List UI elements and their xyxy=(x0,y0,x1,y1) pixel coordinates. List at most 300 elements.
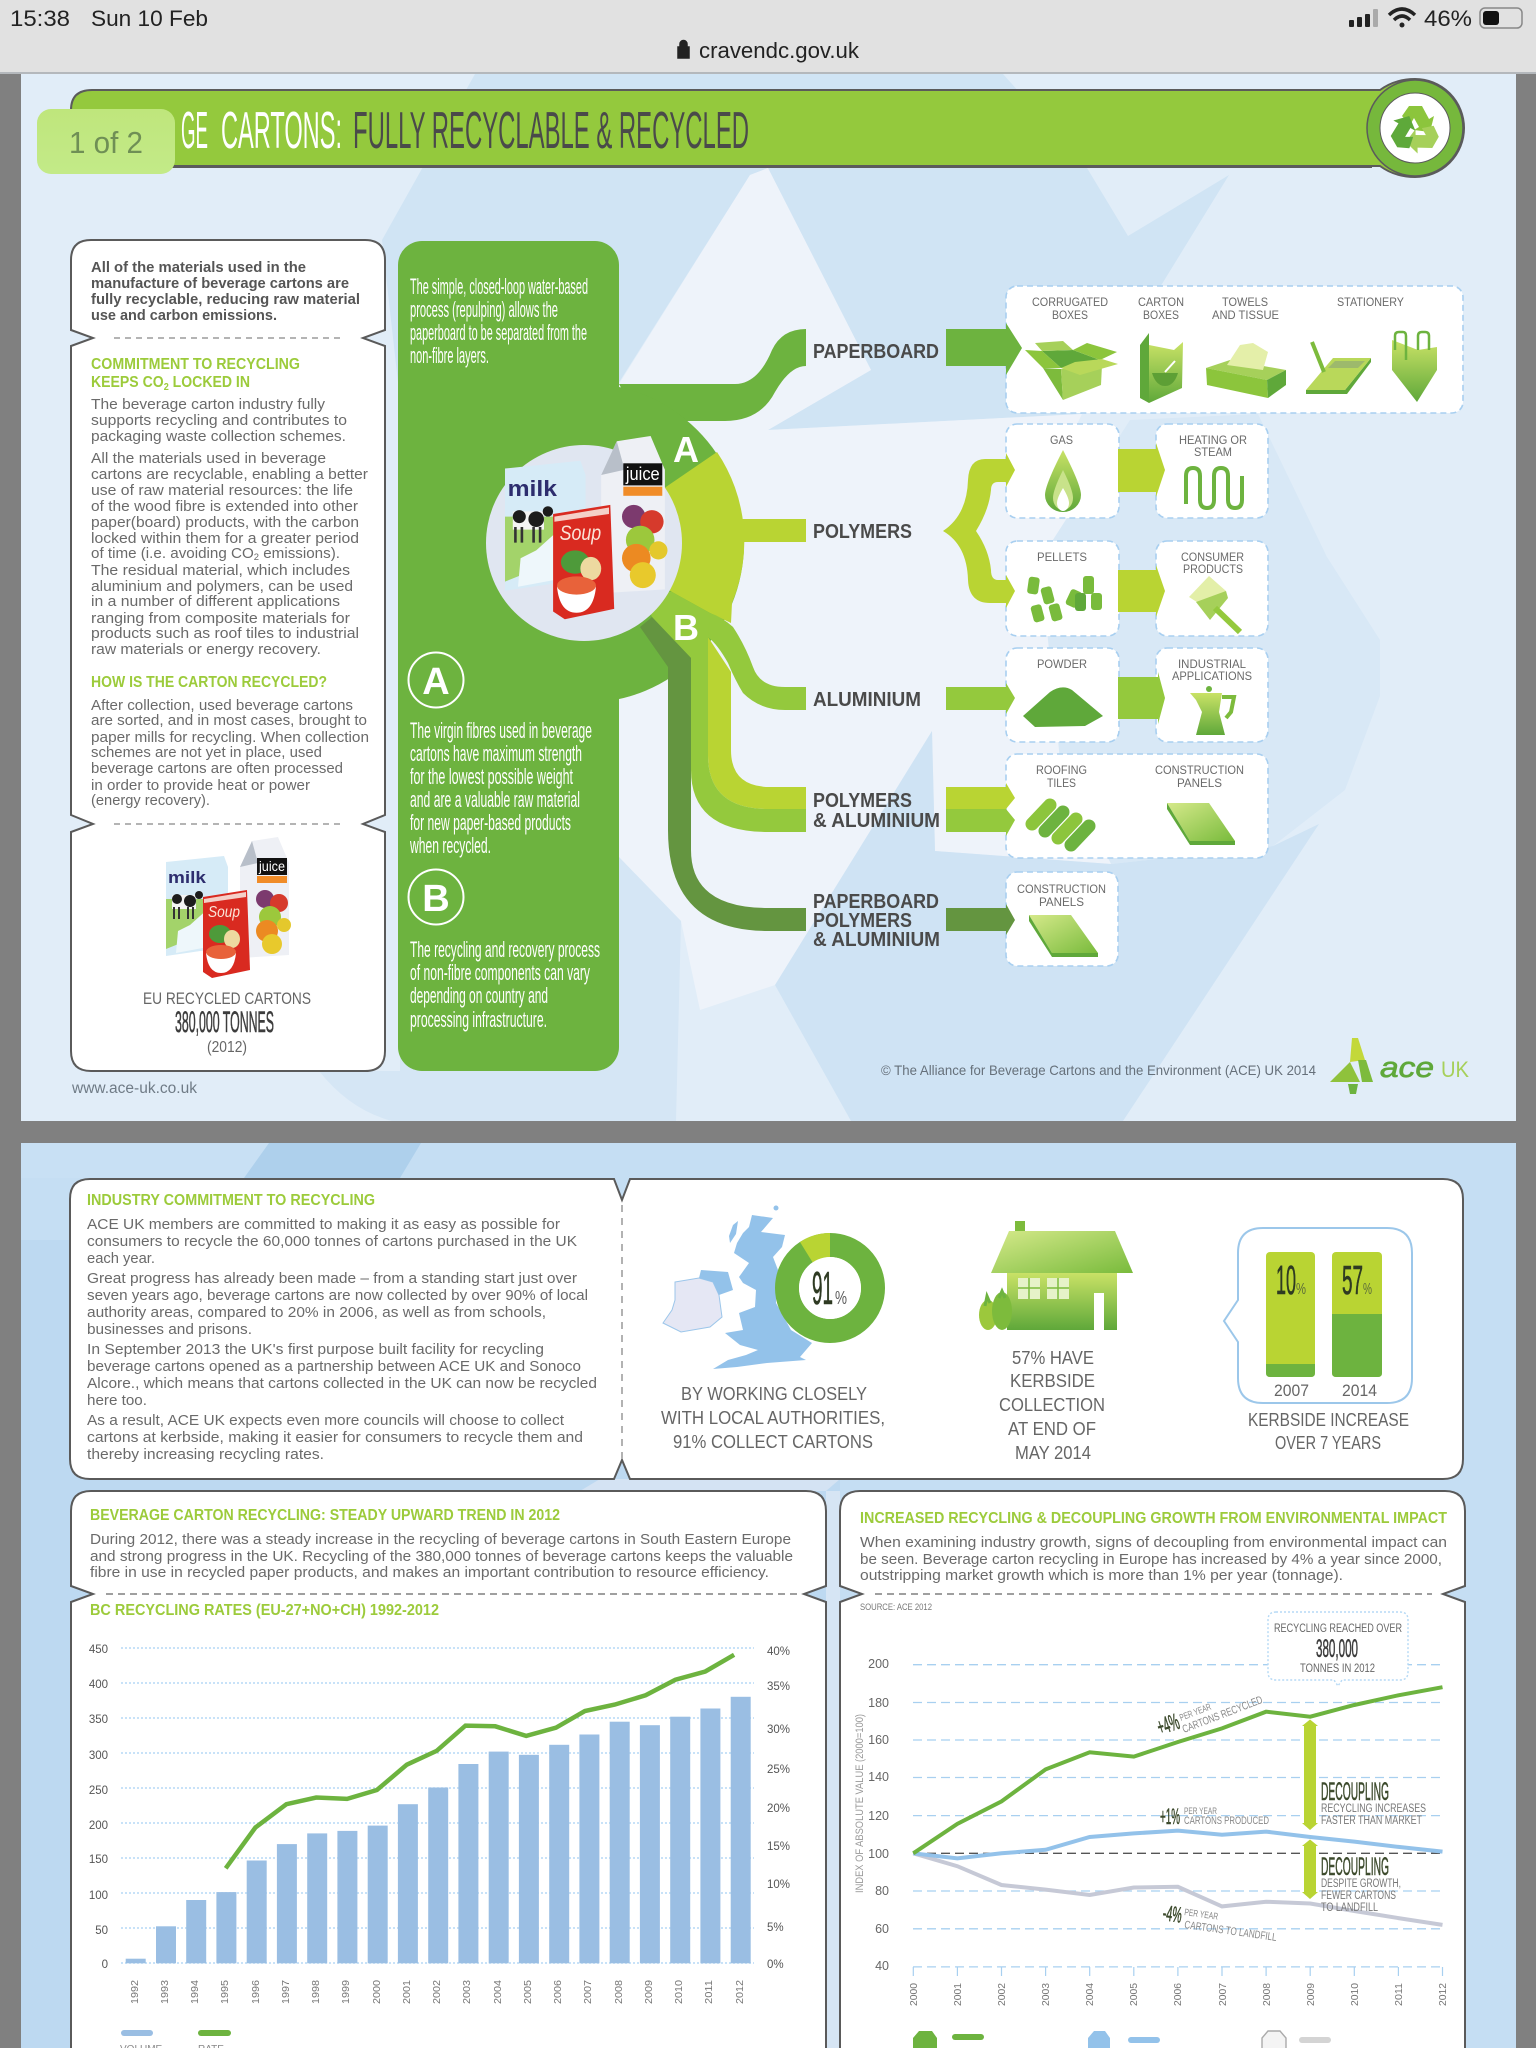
arrow: decoupling lower xyxy=(1302,1840,1318,1899)
bar chart: recycling rates: 30% xyxy=(767,1724,790,1736)
line chart: decoupling: 2000 xyxy=(908,1983,920,2006)
section: commitment to recycling: locked within them for a greater period xyxy=(91,531,359,547)
section: commitment to recycling: All the materials used in beverage xyxy=(91,451,326,467)
box: paperboard products: STATIONERY xyxy=(1337,295,1404,309)
commitment text: As a result, ACE UK expects even more councils will choose to collect xyxy=(87,1413,564,1429)
bar chart: recycling rates: 0% xyxy=(767,1959,784,1971)
browser status bar: 46% xyxy=(1424,6,1472,31)
bar chart: recycling rates: 400 xyxy=(89,1679,108,1691)
icon: pellets xyxy=(1027,576,1102,623)
title banner xyxy=(71,79,1464,177)
note: decoupling upper xyxy=(1321,1778,1426,1827)
arrow: paperboard xyxy=(946,323,1022,375)
stream labels: POLYMERS xyxy=(813,910,912,932)
icon: three cartons: Soup xyxy=(208,904,240,921)
arrow: decoupling upper xyxy=(1302,1720,1318,1830)
bar chart: recycling rates: 40% xyxy=(767,1646,790,1658)
section: how is the carton recycled: are sorted, and in most cases, brought to xyxy=(91,713,367,729)
trend text: BEVERAGE CARTON RECYCLING: STEADY UPWARD TREND IN 2012 xyxy=(90,1507,560,1524)
caption: kerbside increase xyxy=(1248,1409,1409,1453)
stream labels xyxy=(813,341,940,951)
line chart: decoupling: 120 xyxy=(868,1809,889,1823)
arrow: powder to industrial xyxy=(1118,672,1165,724)
icon: moka pot xyxy=(1190,686,1234,735)
icon: three cartons: milk xyxy=(168,868,207,887)
panel: recycling trend chart xyxy=(71,1491,826,2048)
title text: CARTONS: xyxy=(221,102,342,160)
panel: green process explanation xyxy=(398,241,619,1071)
text: virgin fibres: for the lowest possible weight xyxy=(410,764,573,789)
section: how is the carton recycled: beverage cartons are often processed xyxy=(91,761,343,777)
stream labels: POLYMERS xyxy=(813,521,912,543)
text: recovery process: The recycling and recovery process xyxy=(410,937,600,962)
section: how is the carton recycled: After collection, used beverage cartons xyxy=(91,698,353,714)
section: how is the carton recycled: in order to provide heat or power xyxy=(91,778,310,794)
logo: ACE UK: ace xyxy=(1380,1052,1434,1084)
browser status bar xyxy=(0,0,1536,74)
text: virgin fibres: when recycled. xyxy=(409,833,491,858)
line chart: decoupling: 80 xyxy=(875,1884,889,1898)
section: commitment to recycling: COMMITMENT TO RECYCLING xyxy=(91,356,300,373)
page 1 background with recycling shapes xyxy=(21,74,1516,1121)
caption: local authorities: BY WORKING CLOSELY xyxy=(681,1383,867,1404)
bar chart: recycling rates: 450 xyxy=(89,1644,108,1656)
line chart: decoupling: 180 xyxy=(868,1696,889,1710)
box: paperboard products: AND TISSUE xyxy=(1212,308,1279,322)
decoupling text: When examining industry growth, signs of decoupling from environmental impact can xyxy=(860,1535,1447,1551)
note: decoupling lower: DESPITE GROWTH, xyxy=(1321,1878,1401,1890)
text: recovery process: of non-fibre components can vary xyxy=(410,960,590,985)
note: decoupling lower: TO LANDFILL xyxy=(1321,1902,1378,1914)
line chart: decoupling: 2007 xyxy=(1217,1983,1229,2006)
icon: house with bags xyxy=(979,1221,1133,1330)
copyright: © The Alliance for Beverage Cartons and the Environment (ACE) UK 2014 xyxy=(881,1062,1316,1078)
box: industrial applications: APPLICATIONS xyxy=(1172,669,1252,683)
stream labels: & ALUMINIUM xyxy=(813,810,940,832)
note: decoupling lower xyxy=(1321,1853,1401,1914)
commitment text: Great progress has already been made – from a standing start just over xyxy=(87,1271,577,1287)
title text: BEVERA xyxy=(100,102,174,160)
map: UK and Ireland xyxy=(663,1206,812,1369)
bar chart: recycling rates: 2011 xyxy=(703,1980,715,2004)
arrow: polymers and aluminium xyxy=(946,783,1015,836)
panel: decoupling chart xyxy=(840,1491,1465,2048)
bar chart: recycling rates: 0 xyxy=(102,1959,108,1971)
caption: local authorities: WITH LOCAL AUTHORITIES, xyxy=(661,1407,885,1428)
section: commitment to recycling: supports recycling and contributes to xyxy=(91,413,347,429)
chart: donut 91%: 91 xyxy=(812,1262,833,1314)
page badge: 1 of 2 xyxy=(37,109,175,174)
section: commitment to recycling: packaging waste collection schemes. xyxy=(91,429,346,445)
caption: kerbside collection: COLLECTION xyxy=(999,1394,1105,1415)
box: paperboard products xyxy=(1006,286,1463,413)
annotation: +1% cartons produced: +1% xyxy=(1160,1804,1180,1829)
badge A xyxy=(408,652,464,708)
chart: kerbside increase bars xyxy=(1224,1228,1412,1403)
commitment text: ACE UK members are committed to making it as easy as possible for xyxy=(87,1217,560,1233)
legend: decoupling xyxy=(913,2031,1331,2048)
central circle with cartons: juice xyxy=(625,464,660,484)
chart: donut 91%: % xyxy=(835,1288,847,1308)
title text xyxy=(100,102,749,160)
commitment text: thereby increasing recycling rates. xyxy=(87,1447,324,1463)
box: pellets xyxy=(1006,541,1119,636)
callout: 380,000 tonnes: TONNES IN 2012 xyxy=(1300,1663,1375,1675)
text: virgin fibres: cartons have maximum strength xyxy=(410,741,582,766)
note: decoupling upper: DECOUPLING xyxy=(1321,1778,1389,1806)
intro text: All of the materials used in the xyxy=(91,260,306,276)
line chart: decoupling: 2006 xyxy=(1172,1983,1184,2006)
line chart: decoupling: 160 xyxy=(868,1733,889,1747)
icon: gas flame xyxy=(1045,450,1081,512)
icon: corrugated box xyxy=(1025,341,1118,400)
box: gas xyxy=(1006,424,1119,518)
bar chart: recycling rates: 2009 xyxy=(643,1980,655,2004)
bar chart: recycling rates: 2005 xyxy=(522,1980,534,2004)
line chart: decoupling: 100 xyxy=(868,1847,889,1861)
annotation: +1% cartons produced: CARTONS PRODUCED xyxy=(1184,1815,1269,1827)
box: gas: GAS xyxy=(1050,433,1073,447)
bar chart: recycling rates: 20% xyxy=(767,1803,790,1815)
chart: kerbside increase bars: 2014 xyxy=(1342,1381,1377,1400)
chart: kerbside increase bars: 10 xyxy=(1276,1257,1296,1303)
line chart: decoupling: 2008 xyxy=(1261,1983,1273,2006)
commitment text xyxy=(87,1192,597,1463)
stream labels: ALUMINIUM xyxy=(813,689,921,711)
icon: three cartons xyxy=(166,837,291,978)
section: how is the carton recycled xyxy=(91,674,369,809)
annotation: -4% cartons to landfill xyxy=(1161,1900,1277,1944)
intro text: use and carbon emissions. xyxy=(91,308,277,324)
annotation: -4% cartons to landfill: CARTONS TO LANDFILL xyxy=(1184,1919,1277,1944)
box: paperboard products: CARTON xyxy=(1138,295,1184,309)
commitment text: INDUSTRY COMMITMENT TO RECYCLING xyxy=(87,1192,375,1209)
stat: EU recycled cartons: 380,000 TONNES xyxy=(175,1006,274,1039)
stat: EU recycled cartons: EU RECYCLED CARTONS xyxy=(143,989,311,1008)
annotation: +4% cartons recycled: CARTONS RECYCLED xyxy=(1181,1694,1264,1736)
stat: EU recycled cartons: (2012) xyxy=(207,1039,247,1056)
bar chart: recycling rates: 250 xyxy=(89,1785,108,1797)
section: commitment to recycling: LOCKED IN xyxy=(169,374,250,391)
badge B xyxy=(408,870,464,924)
panel: materials text xyxy=(71,240,385,1071)
decoupling text: outstripping market growth which is more than 1% per year (tonnage). xyxy=(860,1568,1343,1584)
stream labels: PAPERBOARD xyxy=(813,891,939,913)
bar chart: recycling rates: 2002 xyxy=(431,1980,443,2004)
annotation: +1% cartons produced: PER YEAR xyxy=(1184,1806,1217,1817)
box: construction panels: PANELS xyxy=(1039,895,1084,909)
bar chart: recycling rates: 1993 xyxy=(159,1980,171,2004)
box: roofing tiles and construction panels: ROOFING xyxy=(1036,763,1087,777)
commitment text: consumers to recycle the 60,000 tonnes of cartons purchased in the UK xyxy=(87,1234,577,1250)
line chart: decoupling: 2003 xyxy=(1040,1983,1052,2006)
box: industrial applications: INDUSTRIAL xyxy=(1178,657,1246,671)
icon: carton box xyxy=(1140,333,1183,403)
commitment text: seven years ago, beverage cartons are now collected by over 90% of local xyxy=(87,1288,588,1304)
line chart: decoupling: 2001 xyxy=(952,1983,964,2006)
badge B: B xyxy=(422,878,450,920)
commitment text: cartons at kerbside, making it easier for consumers to recycle them and xyxy=(87,1430,583,1446)
note: decoupling upper: FASTER THAN MARKET xyxy=(1321,1815,1422,1827)
line chart: decoupling: 40 xyxy=(875,1959,889,1973)
commitment text: In September 2013 the UK's first purpose built facility for recycling xyxy=(87,1342,544,1358)
section: commitment to recycling: KEEPS CO xyxy=(91,374,171,391)
box: powder: POWDER xyxy=(1037,657,1087,671)
line chart: decoupling: 2004 xyxy=(1084,1983,1096,2006)
icon: heating coil xyxy=(1186,468,1242,508)
section: commitment to recycling: aluminium and polymers, can be used xyxy=(91,579,353,595)
box: paperboard products: BOXES xyxy=(1052,308,1088,322)
logo: ACE UK: UK xyxy=(1441,1057,1469,1082)
bar chart: recycling rates: 1999 xyxy=(340,1980,352,2004)
stream letter B: B xyxy=(673,607,699,648)
box: consumer products: CONSUMER xyxy=(1181,550,1244,564)
bar chart: recycling rates: 150 xyxy=(89,1854,108,1866)
note: decoupling lower: FEWER CARTONS xyxy=(1321,1890,1396,1902)
stream labels: PAPERBOARD xyxy=(813,341,939,363)
section: commitment to recycling: The beverage carton industry fully xyxy=(91,397,326,413)
section: commitment to recycling: products such as roof tiles to industrial xyxy=(91,626,359,642)
decoupling text xyxy=(860,1510,1447,1612)
section: how is the carton recycled: (energy recovery). xyxy=(91,793,210,809)
chart: kerbside increase bars: 2007 xyxy=(1274,1381,1309,1400)
intro text: manufacture of beverage cartons are xyxy=(91,276,349,292)
trend text: fibre in use in recycled paper products, and makes an important contribution to resource efficiency. xyxy=(90,1565,769,1581)
line chart: decoupling xyxy=(854,1657,1449,2006)
trend text: BC RECYCLING RATES (EU-27+NO+CH) 1992-2012 xyxy=(90,1602,439,1619)
text: closed-loop process: non-fibre layers. xyxy=(410,343,489,368)
line chart: decoupling: 140 xyxy=(868,1770,889,1784)
box: heating or steam: STEAM xyxy=(1194,445,1232,459)
stream labels: & ALUMINIUM xyxy=(813,929,940,951)
decoupling text: SOURCE: ACE 2012 xyxy=(860,1602,932,1612)
text: recovery process: depending on country and xyxy=(410,983,548,1008)
line chart: decoupling: 200 xyxy=(868,1657,889,1671)
box: paperboard products: BOXES xyxy=(1143,308,1179,322)
icon: three cartons: juice xyxy=(258,858,285,874)
line chart: decoupling: 2002 xyxy=(996,1983,1008,2006)
decoupling text: be seen. Beverage carton recycling in Europe has increased by 4% a year since 2000, xyxy=(860,1552,1442,1568)
intro text: fully recyclable, reducing raw material xyxy=(91,292,360,308)
arrow: aluminium xyxy=(946,683,1015,714)
caption: local authorities: 91% COLLECT CARTONS xyxy=(673,1431,873,1452)
bar chart: recycling rates: 200 xyxy=(89,1820,108,1832)
chart: donut 91% xyxy=(787,1233,873,1331)
section: commitment to recycling: cartons are recyclable, enabling a better xyxy=(91,467,368,483)
section: commitment to recycling: of the wood fibre is extended into other xyxy=(91,499,358,515)
section: commitment to recycling: The residual material, which includes xyxy=(91,563,350,579)
callout: 380,000 tonnes: RECYCLING REACHED OVER xyxy=(1274,1623,1402,1635)
commitment text: authority areas, compared to 20% in 2006, as well as from schools, xyxy=(87,1305,546,1321)
box: consumer products xyxy=(1156,541,1268,636)
bar chart: recycling rates xyxy=(89,1644,790,2004)
commitment text: businesses and prisons. xyxy=(87,1322,252,1338)
commitment text: Alcore., which means that cartons collected in the UK can now be recycled xyxy=(87,1376,597,1392)
caption: local authorities xyxy=(661,1383,885,1452)
stream labels: POLYMERS xyxy=(813,790,912,812)
bar chart: recycling rates: 25% xyxy=(767,1764,790,1776)
bar chart: recycling rates: 300 xyxy=(89,1750,108,1762)
bar chart: recycling rates: 2012 xyxy=(734,1980,746,2004)
box: heating or steam xyxy=(1156,424,1268,518)
bar chart: recycling rates: 2008 xyxy=(613,1980,625,2004)
box: heating or steam: HEATING OR xyxy=(1179,433,1247,447)
box: roofing tiles and construction panels: PANELS xyxy=(1177,776,1222,790)
trend text: During 2012, there was a steady increase in the recycling of beverage cartons in South Eastern Europe xyxy=(90,1532,791,1548)
section: commitment to recycling: of time (i.e. avoiding CO xyxy=(91,546,247,562)
caption: kerbside collection: AT END OF xyxy=(1008,1418,1096,1439)
bar chart: recycling rates: 5% xyxy=(767,1922,784,1934)
annotation: +1% cartons produced xyxy=(1160,1804,1269,1829)
caption: kerbside collection xyxy=(999,1347,1105,1463)
badge A: A xyxy=(422,661,450,703)
arrow: paperboard polymers and aluminium xyxy=(946,904,1015,935)
bar chart: recycling rates: 1992 xyxy=(129,1980,141,2004)
website address: www.ace-uk.co.uk xyxy=(71,1080,197,1097)
line chart: decoupling: INDEX OF ABSOLUTE VALUE (2000=100) xyxy=(854,1714,866,1893)
text: virgin fibres: and are a valuable raw material xyxy=(410,787,580,812)
caption: kerbside increase: KERBSIDE INCREASE xyxy=(1248,1409,1409,1430)
line chart: decoupling: 2005 xyxy=(1128,1983,1140,2006)
icon: paint brush xyxy=(1189,576,1240,632)
line chart: decoupling: 2010 xyxy=(1349,1983,1361,2006)
box: powder xyxy=(1006,648,1119,742)
line chart: decoupling: 2012 xyxy=(1437,1983,1449,2006)
trend text xyxy=(90,1507,793,1619)
panel: industry commitment xyxy=(70,1179,1463,1479)
panel: green process explanation: paperboard to be separated from the xyxy=(410,320,587,345)
bar chart: recycling rates: 1996 xyxy=(250,1980,262,2004)
section: commitment to recycling: ranging from composite materials for xyxy=(91,611,350,627)
annotation: -4% cartons to landfill: -4% xyxy=(1161,1900,1184,1928)
bar chart: recycling rates: 15% xyxy=(767,1841,790,1853)
icon: tissue box xyxy=(1206,343,1286,398)
section: how is the carton recycled: schemes are not yet in place, used xyxy=(91,745,322,761)
section: commitment to recycling: in a number of different applications xyxy=(91,594,340,610)
section: commitment to recycling: use of raw material resources: the life xyxy=(91,483,353,499)
section: commitment to recycling: 2 xyxy=(164,382,169,393)
icon: notebook xyxy=(1306,342,1371,394)
text: virgin fibres xyxy=(409,718,592,858)
text: recovery process: processing infrastructure. xyxy=(410,1007,547,1032)
commitment text: beverage cartons opened as a partnership between ACE UK and Sonoco xyxy=(87,1359,581,1375)
panel: green process explanation: The simple, closed-loop water-based xyxy=(410,274,588,299)
section: commitment to recycling: raw materials or energy recovery. xyxy=(91,642,321,658)
icon: roofing tiles xyxy=(1032,805,1089,845)
browser status bar: Sun 10 Feb xyxy=(91,6,208,31)
bar chart: recycling rates: 50 xyxy=(95,1925,108,1937)
stat: EU recycled cartons xyxy=(143,989,311,1056)
line chart: decoupling: 2011 xyxy=(1393,1983,1405,2006)
page 2 background xyxy=(21,1143,1516,2048)
box: construction panels xyxy=(1006,872,1118,966)
page badge: 1 of 2: 1 of 2 xyxy=(69,125,143,160)
bar chart: recycling rates: 2007 xyxy=(582,1980,594,2004)
icon: powder pile xyxy=(1023,687,1103,727)
arrow: gas to heating xyxy=(1118,443,1165,497)
callout: 380,000 tonnes xyxy=(1268,1612,1408,1686)
text: virgin fibres: for new paper-based products xyxy=(410,810,571,835)
bar chart: recycling rates: 350 xyxy=(89,1714,108,1726)
arrow: polymers bracket xyxy=(943,453,1015,608)
caption: kerbside collection: KERBSIDE xyxy=(1010,1370,1095,1391)
box: consumer products: PRODUCTS xyxy=(1183,562,1243,576)
bar chart: recycling rates: 2010 xyxy=(673,1980,685,2004)
caption: kerbside collection: MAY 2014 xyxy=(1015,1442,1091,1463)
chart: kerbside increase bars: % xyxy=(1296,1281,1306,1298)
bar chart: recycling rates: 35% xyxy=(767,1681,790,1693)
box: construction panels: CONSTRUCTION xyxy=(1017,882,1106,896)
icon: construction panel xyxy=(1029,915,1098,957)
line chart: decoupling: 2009 xyxy=(1305,1983,1317,2006)
browser status bar: cravendc.gov.uk xyxy=(699,38,860,63)
caption: kerbside collection: 57% HAVE xyxy=(1012,1347,1094,1368)
bar chart: recycling rates: 2006 xyxy=(552,1980,564,2004)
box: pellets: PELLETS xyxy=(1037,550,1087,564)
title text: GE xyxy=(181,102,208,160)
section: commitment to recycling: emissions). xyxy=(259,546,340,562)
text: recovery process xyxy=(410,937,600,1032)
bar chart: recycling rates: 2003 xyxy=(461,1980,473,2004)
browser status bar: 15:38 xyxy=(10,6,70,31)
title banner: FULLY RECYCLABLE & RECYCLED xyxy=(353,102,749,160)
box: roofing tiles and construction panels xyxy=(1006,754,1268,858)
text: closed-loop process xyxy=(410,274,588,368)
trend text: and strong progress in the UK. Recycling of the 380,000 tonnes of beverage cartons keeps the valuable xyxy=(90,1549,793,1565)
box: industrial applications xyxy=(1156,648,1268,742)
bar chart: recycling rates: 2004 xyxy=(492,1980,504,2004)
text: closed-loop process: process (repulping) allows the xyxy=(410,297,558,322)
bar chart: recycling rates: 10% xyxy=(767,1879,790,1891)
central circle with cartons: Soup xyxy=(560,522,601,545)
bar chart: recycling rates: 2000 xyxy=(371,1980,383,2004)
section: commitment to recycling xyxy=(91,356,368,658)
logo: ACE UK xyxy=(1330,1038,1469,1094)
caption: kerbside increase: OVER 7 YEARS xyxy=(1275,1432,1381,1453)
chart: kerbside increase bars: % xyxy=(1363,1281,1372,1298)
section: commitment to recycling: paper(board) products, with the carbon xyxy=(91,515,359,531)
legend: recycling rates xyxy=(120,2030,231,2048)
decoupling text: INCREASED RECYCLING & DECOUPLING GROWTH FROM ENVIRONMENTAL IMPACT xyxy=(860,1510,1447,1527)
bar chart: recycling rates: 1995 xyxy=(219,1980,231,2004)
box: roofing tiles and construction panels: CONSTRUCTION xyxy=(1155,763,1244,777)
annotation: +4% cartons recycled xyxy=(1154,1694,1264,1740)
commitment text: here too. xyxy=(87,1393,147,1409)
icon: shopping bag xyxy=(1392,332,1437,402)
arrow: pellets to consumer products xyxy=(1118,565,1165,617)
note: decoupling upper: RECYCLING INCREASES xyxy=(1321,1803,1426,1815)
bar chart: recycling rates: 1998 xyxy=(310,1980,322,2004)
chart: kerbside increase bars: 57 xyxy=(1342,1257,1363,1303)
panel: decoupling chart: DECOUPLING xyxy=(1321,1853,1389,1881)
bar chart: recycling rates: 1994 xyxy=(189,1980,201,2004)
line chart: decoupling: 60 xyxy=(875,1922,889,1936)
section: how is the carton recycled: HOW IS THE CARTON RECYCLED? xyxy=(91,674,327,691)
intro text xyxy=(91,260,360,324)
annotation: +4% cartons recycled: PER YEAR xyxy=(1178,1702,1213,1724)
icon: recycling symbol xyxy=(1367,80,1463,176)
bar chart: recycling rates: 2001 xyxy=(401,1980,413,2004)
stream letter A: A xyxy=(673,429,699,470)
section: commitment to recycling: 2 xyxy=(254,552,259,562)
commitment text: each year. xyxy=(87,1251,155,1267)
text: virgin fibres: The virgin fibres used in beverage xyxy=(410,718,592,743)
box: paperboard products: TOWELS xyxy=(1222,295,1268,309)
bar chart: recycling rates: 100 xyxy=(89,1890,108,1902)
section: how is the carton recycled: paper mills for recycling. When collection xyxy=(91,730,369,746)
icon: construction panel xyxy=(1167,803,1235,845)
annotation: -4% cartons to landfill: PER YEAR xyxy=(1184,1907,1219,1923)
